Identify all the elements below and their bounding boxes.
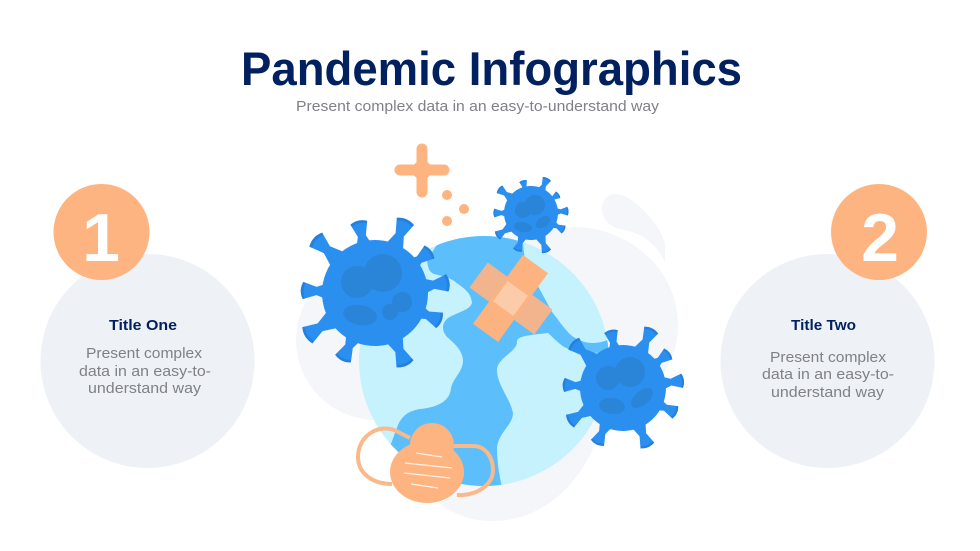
panel: item one (40, 184, 254, 468)
panel one body text: data in an easy-to- (79, 363, 211, 380)
panel two body text: understand way (771, 384, 885, 401)
panel one heading: Title One (109, 317, 177, 334)
number badge two: 2 (861, 200, 899, 276)
title: Pandemic Infographics (241, 42, 742, 95)
panel two background circle (720, 254, 934, 468)
virus: small top (493, 176, 569, 254)
panel two heading: Title Two (791, 317, 856, 334)
panel two body text (762, 349, 894, 401)
panel one body text (79, 345, 211, 397)
subtitle: Present complex data in an easy-to-understand way (296, 98, 660, 115)
globe (359, 236, 608, 486)
illustration: pandemic globe (296, 149, 685, 521)
bandage (470, 255, 552, 342)
virus: large left (300, 215, 451, 370)
land masses (390, 236, 608, 486)
icon: face mask (358, 423, 493, 503)
dots (442, 190, 469, 226)
number badge one (54, 184, 150, 280)
panel one body text: Present complex (86, 345, 203, 362)
icon: plus sign (400, 149, 444, 192)
number badge one: 1 (82, 200, 120, 276)
panel one background circle (40, 254, 254, 468)
panel: item two (720, 184, 934, 468)
virus: right (562, 325, 685, 450)
panel two body text: data in an easy-to- (762, 366, 894, 383)
panel one body text: understand way (88, 380, 202, 397)
number badge two (831, 184, 927, 280)
panel two body text: Present complex (770, 349, 887, 366)
background blobs (296, 194, 678, 521)
